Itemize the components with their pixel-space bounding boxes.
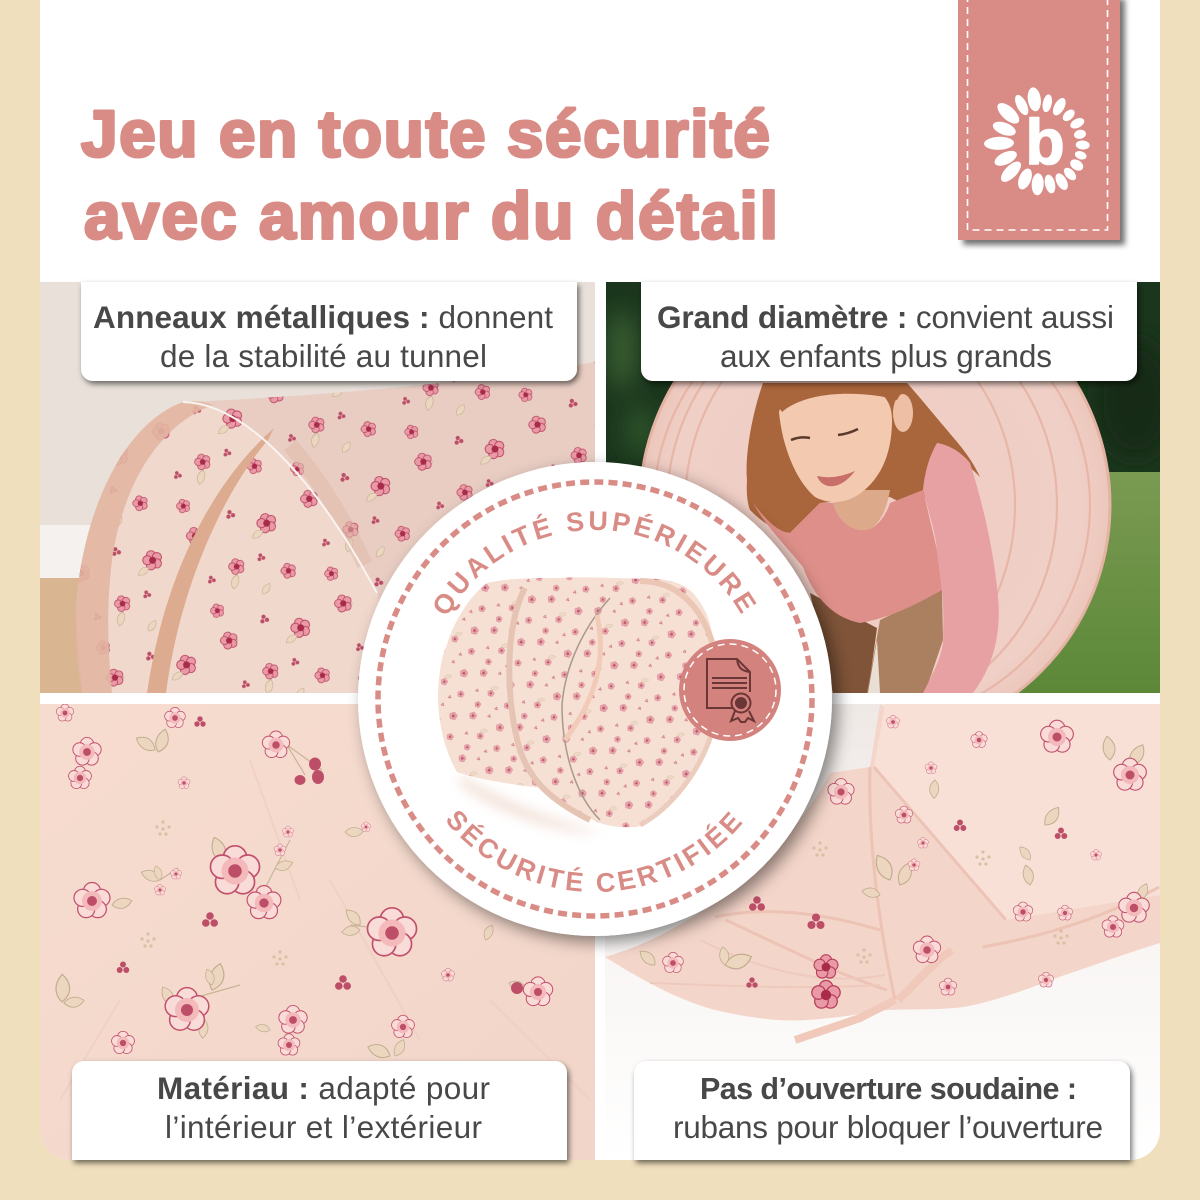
tunnel opening bbox=[76, 402, 400, 693]
quality badge bbox=[353, 457, 849, 953]
fabric folds bbox=[715, 767, 1159, 1000]
hair fringe bbox=[780, 383, 900, 412]
panel: material photo bbox=[40, 704, 595, 1160]
badge text bottom: SÉCURITÉ CERTIFIÉE bbox=[447, 811, 742, 892]
lower fabric bbox=[605, 704, 1160, 1021]
body print bbox=[78, 362, 595, 586]
callout: material bbox=[72, 1061, 567, 1160]
callout: large diameter: aux enfants plus grands bbox=[720, 338, 1052, 374]
opening print bbox=[78, 406, 364, 693]
brand label bbox=[958, 0, 1120, 240]
hair back bbox=[747, 383, 980, 533]
title bbox=[81, 96, 778, 252]
ear bbox=[893, 394, 913, 432]
tunnel opening circle bbox=[642, 381, 1112, 693]
panel: large diameter photo bbox=[606, 282, 1160, 693]
callout: metal rings: Anneaux métalliques : donnent bbox=[93, 299, 553, 335]
neck bbox=[833, 490, 890, 530]
pants bbox=[810, 593, 877, 693]
sleeve bbox=[923, 443, 999, 693]
callout: metal rings bbox=[81, 282, 577, 381]
cherries bbox=[294, 758, 324, 785]
panel: ribbons photo bbox=[605, 704, 1160, 1160]
callout: no sudden opening bbox=[634, 1061, 1130, 1160]
product tunnel shadow bbox=[460, 775, 600, 832]
icon: certificate bbox=[707, 659, 754, 722]
metal ring bbox=[183, 402, 377, 593]
badge text top: QUALITÉ SUPÉRIEURE bbox=[434, 511, 756, 614]
inner hoop band bbox=[147, 428, 274, 693]
face bbox=[779, 383, 892, 502]
girl bbox=[747, 383, 999, 693]
certificate seal bbox=[679, 639, 781, 741]
callout: metal rings: de la stabilité au tunnel bbox=[160, 338, 487, 374]
floral print bbox=[53, 704, 553, 1059]
callout: large diameter bbox=[641, 282, 1137, 381]
fold band bbox=[290, 445, 365, 565]
product tunnel bbox=[438, 577, 715, 827]
callout: material: Matériau : adapté pour bbox=[157, 1070, 490, 1106]
callout: material: l’intérieur et l’extérieur bbox=[165, 1109, 482, 1145]
fabric rim band bbox=[76, 401, 213, 693]
callout: no sudden opening: rubans pour bloquer l’ouverture bbox=[673, 1109, 1103, 1145]
shirt body bbox=[753, 490, 942, 623]
callout: large diameter: Grand diamètre : convient aussi bbox=[657, 299, 1114, 335]
callout: no sudden opening: Pas d’ouverture soudaine : bbox=[700, 1072, 1077, 1106]
panel: metal rings photo bbox=[40, 282, 595, 693]
title: avec amour du détail bbox=[84, 178, 778, 252]
icon: flower logo bbox=[984, 87, 1090, 196]
floral print bbox=[637, 715, 1149, 1008]
ribbons bbox=[795, 950, 952, 1040]
upper flap bbox=[874, 704, 1160, 920]
icon: flower logo: b bbox=[1025, 106, 1065, 178]
tunnel body bbox=[76, 362, 595, 606]
title: Jeu en toute sécurité bbox=[81, 96, 770, 170]
